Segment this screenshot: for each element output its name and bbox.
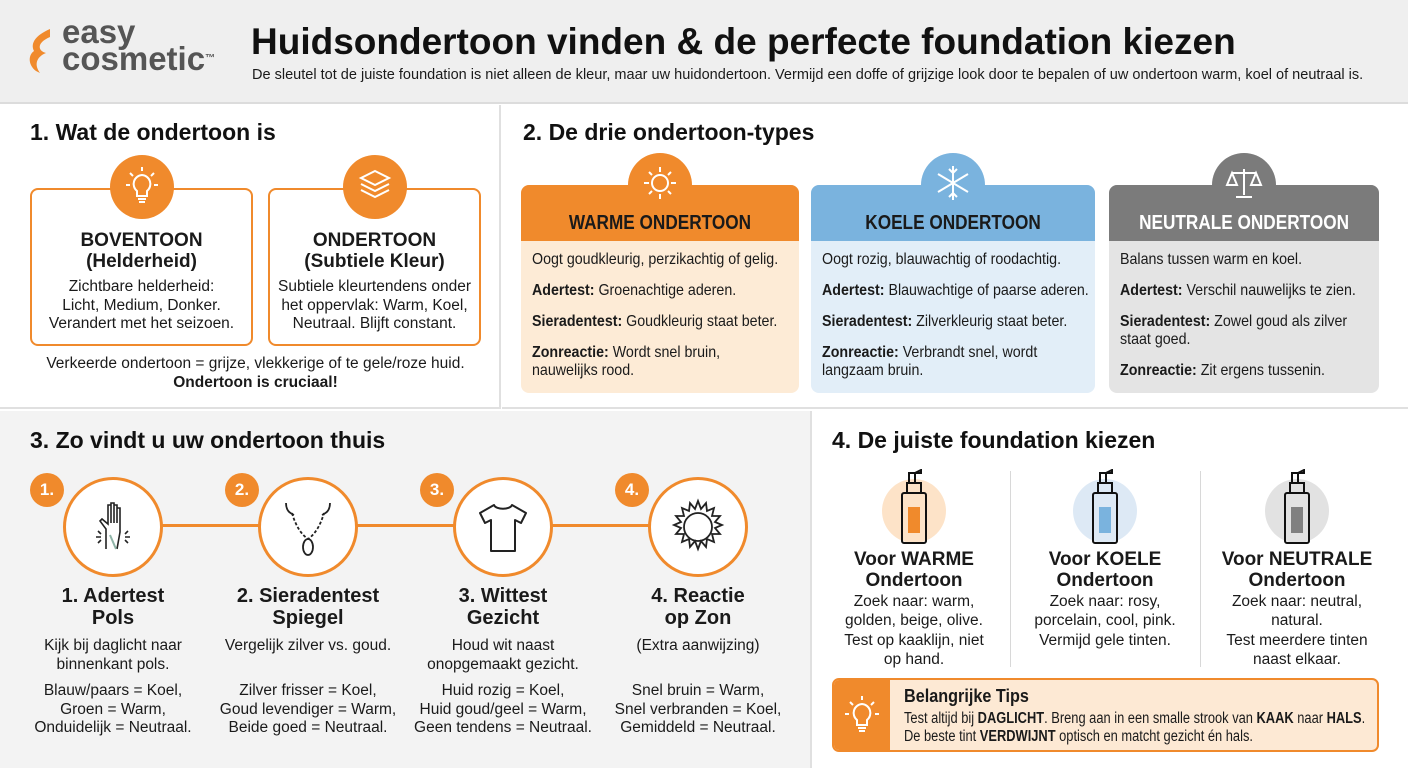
box: boventoon: Zichtbare helderheid:	[69, 278, 214, 295]
column: neutraal	[1222, 469, 1372, 668]
column: neutraal: Ondertoon	[1248, 570, 1346, 591]
column: warm	[844, 469, 984, 668]
column: warm: Test op kaaklijn, niet	[844, 632, 984, 649]
column: koel: porcelain, cool, pink.	[1034, 612, 1176, 628]
step 1: binnenkant pols.	[57, 656, 169, 672]
box: ondertoon: (Subtiele Kleur)	[304, 251, 445, 272]
box: boventoon	[30, 188, 253, 346]
step 3: Houd wit naast	[452, 637, 554, 654]
step 4: Snel bruin = Warm,	[632, 682, 764, 699]
card: neutraal: Zonreactie: Zit ergens tussenin.	[1120, 362, 1325, 379]
step 1: 1. Adertest	[62, 585, 164, 607]
note: Ondertoon is cruciaal!	[173, 374, 338, 390]
step 3: 3. Wittest	[459, 585, 547, 607]
column: neutraal: naast elkaar.	[1253, 650, 1341, 668]
box: ondertoon: het oppervlak: Warm, Koel,	[281, 296, 468, 314]
step 3: Huid rozig = Koel,	[442, 682, 564, 699]
step 2: 2.	[235, 480, 249, 499]
icon: tips bulb	[834, 680, 890, 752]
step 3: Huid goud/geel = Warm,	[420, 700, 586, 718]
card: koel: langzaam bruin.	[822, 362, 923, 379]
card: warm	[521, 153, 799, 393]
step 2: Beide goed = Neutraal.	[228, 719, 388, 736]
column: koel: Voor KOELE	[1049, 549, 1161, 570]
step 1	[30, 473, 192, 736]
logo: easy	[62, 13, 135, 50]
column: koel: Ondertoon	[1056, 570, 1154, 591]
column: koel: Zoek naar: rosy,	[1050, 593, 1160, 610]
connector line	[113, 524, 698, 527]
step 3: Gezicht	[467, 607, 539, 629]
card: warm: Zonreactie: Wordt snel bruin,	[532, 344, 720, 361]
card: neutraal: NEUTRALE ONDERTOON	[1139, 212, 1349, 234]
step 2: 2. Sieradentest	[237, 585, 379, 607]
heading 4: 4. De juiste foundation kiezen	[832, 427, 1155, 453]
panel: section 2	[502, 105, 1408, 409]
card: koel: KOELE ONDERTOON	[865, 212, 1041, 234]
box: boventoon: Verandert met het seizoen.	[49, 315, 234, 332]
column: warm: Voor WARME	[854, 549, 974, 570]
card: warm: Oogt goudkleurig, perzikachtig of gelig.	[532, 251, 778, 268]
card: koel: Oogt rozig, blauwachtig of roodachtig.	[822, 251, 1061, 268]
card: neutraal	[1109, 153, 1379, 393]
panel: section 3	[0, 411, 812, 768]
logo	[30, 13, 215, 77]
panel: section 1	[0, 105, 501, 409]
column: koel	[1034, 469, 1176, 649]
heading 3: 3. Zo vindt u uw ondertoon thuis	[30, 427, 385, 453]
column: neutraal: Voor NEUTRALE	[1222, 549, 1372, 570]
box: ondertoon: Neutraal. Blijft constant.	[293, 315, 456, 332]
card: warm: nauwelijks rood.	[532, 362, 634, 379]
step 1: Kijk bij daglicht naar	[44, 637, 182, 654]
step 1: Blauw/paars = Koel,	[44, 682, 182, 699]
step 4	[615, 473, 781, 736]
column: warm: Zoek naar: warm,	[854, 593, 974, 610]
note	[46, 355, 465, 390]
icon: layers	[343, 155, 407, 219]
step 2: Vergelijk zilver vs. goud.	[225, 637, 391, 654]
column: neutraal: Zoek naar: neutral,	[1232, 593, 1362, 610]
step 1: Onduidelijk = Neutraal.	[34, 719, 192, 736]
card: neutraal: Adertest: Verschil nauwelijks te zien.	[1120, 282, 1356, 299]
icon: lightbulb	[110, 155, 174, 219]
box: ondertoon	[268, 188, 481, 346]
header band	[0, 0, 1408, 104]
box: ondertoon: Subtiele kleurtendens onder	[278, 278, 471, 295]
step 2	[220, 473, 396, 736]
step 4: Snel verbranden = Koel,	[615, 700, 781, 718]
step 1: Groen = Warm,	[60, 700, 166, 718]
step 3: 3.	[430, 480, 444, 499]
card: koel: Sieradentest: Zilverkleurig staat beter.	[822, 313, 1067, 330]
column: warm: op hand.	[884, 650, 944, 668]
step 3	[414, 473, 592, 736]
subtitle: De sleutel tot de juiste foundation is niet alleen de kleur, maar uw huidondertoon. Vermijd een doffe of grijzige look door te bepalen of uw ondertoon warm, koel of neutraal is.	[252, 66, 1363, 83]
callout: tips	[832, 678, 1379, 752]
step 3: onopgemaakt gezicht.	[427, 656, 579, 672]
step 1: 1.	[40, 480, 54, 499]
step 2: Zilver frisser = Koel,	[239, 682, 377, 699]
column: neutraal: Test meerdere tinten	[1226, 632, 1368, 649]
step 3: Geen tendens = Neutraal.	[414, 719, 592, 736]
note: Verkeerde ondertoon = grijze, vlekkerige of te gele/roze huid.	[46, 355, 465, 372]
card: neutraal: Balans tussen warm en koel.	[1120, 251, 1302, 268]
card: koel	[811, 153, 1095, 393]
heading 2: 2. De drie ondertoon-types	[523, 119, 814, 145]
heading 1: 1. Wat de ondertoon is	[30, 119, 276, 145]
step 2: Goud levendiger = Warm,	[220, 700, 396, 718]
card: neutraal: Sieradentest: Zowel goud als zilver	[1120, 313, 1347, 330]
step 4: op Zon	[665, 607, 731, 629]
column: warm: golden, beige, olive.	[845, 612, 983, 628]
callout: tips: De beste tint VERDWIJNT optisch en matcht gezicht én hals.	[904, 728, 1253, 745]
card: warm: Sieradentest: Goudkleurig staat beter.	[532, 313, 777, 330]
step 2: Spiegel	[272, 607, 344, 629]
step 4: 4. Reactie	[651, 585, 745, 607]
step 4: 4.	[625, 480, 639, 499]
column: neutraal: natural.	[1271, 612, 1323, 628]
box: boventoon: BOVENTOON	[80, 230, 203, 251]
card: neutraal: staat goed.	[1120, 331, 1190, 348]
card: warm: WARME ONDERTOON	[569, 212, 751, 234]
column: warm: Ondertoon	[865, 570, 963, 591]
box: ondertoon: ONDERTOON	[313, 230, 436, 251]
callout: tips: Test altijd bij DAGLICHT. Breng aan in een smalle strook van KAAK naar HALS.	[904, 710, 1365, 727]
step 1: Pols	[92, 607, 134, 629]
card: koel: Zonreactie: Verbrandt snel, wordt	[822, 344, 1037, 361]
box: boventoon: (Helderheid)	[86, 251, 197, 272]
box: boventoon: Licht, Medium, Donker.	[62, 296, 221, 314]
logo: cosmetic™	[62, 40, 215, 77]
step 4: Gemiddeld = Neutraal.	[620, 719, 776, 736]
column: koel: Vermijd gele tinten.	[1039, 632, 1171, 649]
title: Huidsondertoon vinden & de perfecte foundation kiezen	[251, 21, 1236, 62]
callout: tips: Belangrijke Tips	[904, 686, 1029, 706]
card: koel: Adertest: Blauwachtige of paarse aderen.	[822, 282, 1089, 299]
card: warm: Adertest: Groenachtige aderen.	[532, 282, 736, 299]
step 4: (Extra aanwijzing)	[636, 637, 760, 654]
panel: section 4	[814, 411, 1408, 768]
